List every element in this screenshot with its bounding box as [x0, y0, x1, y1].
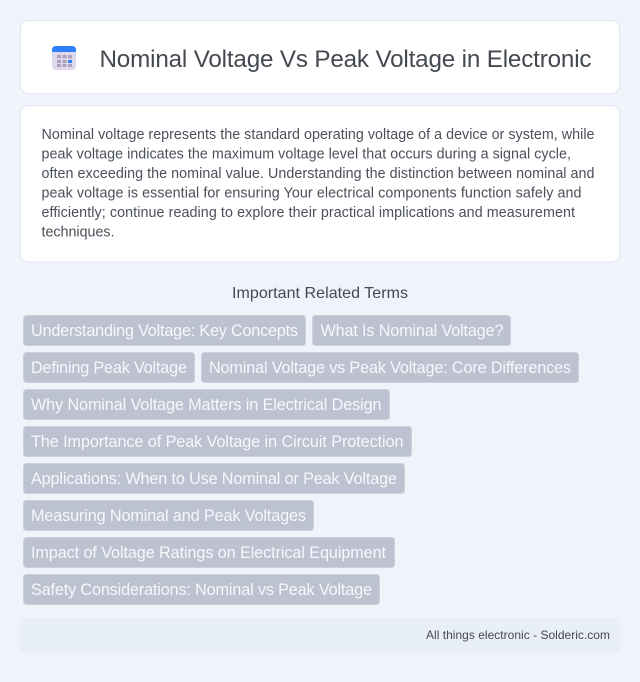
tag list	[24, 316, 578, 604]
panel: description: peak voltage is essential for ensuring Your electrical components function safely and	[42, 186, 582, 202]
tag: why nominal voltage matters: Why Nominal Voltage Matters in Electrical Design	[31, 396, 382, 414]
tag: safety considerations: Safety Considerations: Nominal vs Peak Voltage	[31, 581, 372, 599]
footer	[20, 618, 620, 652]
tag: applications	[24, 464, 404, 494]
panel: description: often exceeding the nominal value. Understanding the distinction between nominal and	[42, 166, 595, 182]
tag: impact of ratings: Impact of Voltage Ratings on Electrical Equipment	[31, 544, 386, 562]
tag: understanding voltage: Understanding Voltage: Key Concepts	[31, 322, 298, 340]
tag: impact of ratings	[24, 538, 394, 568]
tag: core differences	[202, 352, 578, 382]
tag: core differences: Nominal Voltage vs Peak Voltage: Core Differences	[209, 359, 571, 377]
header panel	[20, 20, 620, 94]
title: Nominal Voltage Vs Peak Voltage in Electronic	[100, 46, 592, 73]
panel: description: efficiently; continue reading to explore their practical implications and measurement	[42, 205, 575, 221]
tag: importance of peak voltage	[24, 426, 412, 456]
tag: safety considerations	[24, 574, 380, 604]
tag: measuring: Measuring Nominal and Peak Voltages	[31, 507, 306, 525]
tag: measuring	[24, 500, 314, 530]
tag: defining peak voltage: Defining Peak Voltage	[31, 359, 187, 377]
panel: description: peak voltage indicates the maximum voltage level that occurs during a signal cycle,	[42, 146, 571, 162]
tag: what is nominal voltage	[312, 316, 510, 346]
tag: defining peak voltage	[24, 352, 194, 382]
heading: related terms: Important Related Terms	[232, 285, 408, 302]
panel: description	[20, 106, 620, 262]
tag: what is nominal voltage: What Is Nominal Voltage?	[320, 322, 504, 340]
panel: description: Nominal voltage represents the standard operating voltage of a device or system, while	[42, 127, 595, 143]
icon: calendar grid	[52, 46, 76, 70]
tag: applications: Applications: When to Use Nominal or Peak Voltage	[31, 470, 397, 488]
tag: why nominal voltage matters	[24, 390, 390, 420]
tag: importance of peak voltage: The Importance of Peak Voltage in Circuit Protection	[31, 433, 404, 451]
tag: understanding voltage	[24, 316, 306, 346]
footer: All things electronic - Solderic.com	[426, 628, 610, 642]
panel: description: techniques.	[42, 224, 114, 240]
